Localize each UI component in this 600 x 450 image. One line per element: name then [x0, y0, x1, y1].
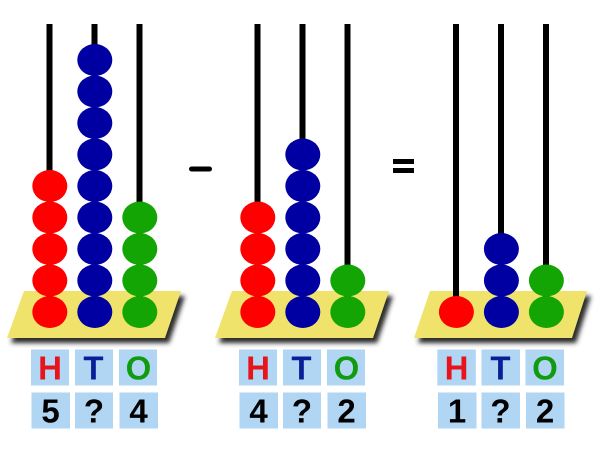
abacus 2 label tiles [239, 349, 366, 430]
abacus 1 label tiles: 4 [129, 392, 148, 430]
abacus 1: minuend 5?4 [7, 24, 185, 430]
abacus 3 tens beads [484, 233, 519, 328]
abacus 3 label tiles: T [490, 349, 511, 386]
abacus 3 ones beads [529, 264, 564, 328]
abacus 1 label tiles: 5 [41, 392, 60, 430]
abacus 3 hundreds bead [439, 296, 474, 328]
abacus 1 hundreds beads [32, 170, 67, 328]
equals sign [393, 159, 414, 173]
abacus 2 tens beads [285, 138, 320, 328]
abacus 3 label tiles: H [445, 349, 468, 386]
abacus 3 rods [453, 24, 549, 304]
abacus 2 label tiles: 2 [337, 392, 356, 430]
abacus 3 label tiles: ? [490, 392, 511, 430]
abacus 2 hundreds beads [240, 202, 275, 328]
abacus 3 label tiles: 2 [536, 392, 554, 430]
abacus 3 label tiles: 1 [448, 392, 466, 430]
abacus 2 base [215, 291, 393, 343]
abacus 2 label tiles: 4 [249, 392, 268, 430]
abacus 2 label tiles: H [246, 349, 270, 386]
abacus 3 label tiles [437, 349, 564, 430]
abacus 1 label tiles: H [38, 349, 62, 386]
abacus 3 base [414, 291, 591, 343]
abacus 2 rods [254, 24, 350, 304]
minus sign [189, 166, 212, 172]
abacus 1 ones beads [122, 202, 157, 328]
abacus 2 label tiles: O [334, 349, 359, 386]
abacus 1 label tiles: T [83, 349, 104, 386]
abacus 3: result 1?2 [414, 24, 591, 430]
abacus 1 tens beads [77, 44, 112, 328]
abacus 3 label tiles: O [532, 349, 558, 386]
abacus 2 label tiles: T [291, 349, 312, 386]
abacus 2 ones beads [330, 264, 365, 328]
abacus 1 rods [46, 24, 142, 304]
abacus 1 label tiles: ? [84, 392, 104, 430]
abacus 1 label tiles: O [126, 349, 151, 386]
abacus 2 label tiles: ? [292, 392, 312, 430]
abacus 1 label tiles [31, 349, 158, 430]
abacus 1 base [7, 291, 185, 343]
abacus 2: subtrahend 4?2 [215, 24, 393, 430]
